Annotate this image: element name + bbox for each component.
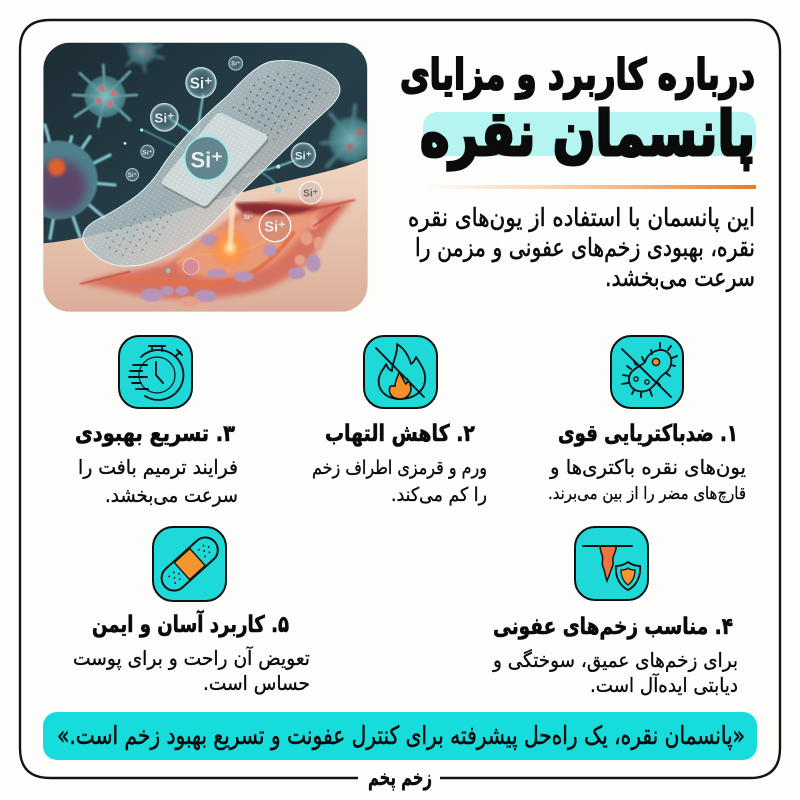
wound <box>80 200 355 307</box>
description: ورم و قرمزی اطراف زخم <box>312 457 487 479</box>
description: سرعت می‌بخشد. <box>105 483 238 507</box>
panel: benefit 4 infected wounds <box>492 527 738 697</box>
silver ion bubbles: Si⁺ <box>155 110 174 125</box>
virus: top centre <box>123 37 163 72</box>
description <box>492 648 738 697</box>
description: فرایند ترمیم بافت را <box>78 455 238 479</box>
silver ion bubbles: Si⁺ <box>295 150 312 162</box>
glow rays <box>143 93 303 250</box>
callout banner <box>43 712 757 760</box>
description <box>73 645 310 695</box>
silver ion bubbles: Si⁺ <box>190 147 223 172</box>
silver ion bubbles: Si⁺ <box>128 172 137 179</box>
silver ion bubbles: Si⁺ <box>303 189 318 200</box>
silver ion bubbles <box>124 56 322 273</box>
intro paragraph <box>408 203 755 292</box>
heading: ۱. ضدباکتریایی قوی <box>558 421 738 447</box>
description <box>312 457 487 506</box>
description: حساس است. <box>203 671 310 695</box>
icon: wound and shield <box>575 527 648 600</box>
description <box>78 455 238 507</box>
icon: bacteria crossed out <box>611 336 683 408</box>
heading: ۳. تسریع بهبودی <box>75 421 235 447</box>
intro paragraph: این پانسمان با استفاده از یون‌های نقره <box>408 203 755 232</box>
icon: adhesive bandage <box>153 527 226 601</box>
description: را کم می‌کند. <box>391 484 487 506</box>
title highlight <box>423 112 756 156</box>
silver ion bubbles: Si⁺ <box>142 149 153 156</box>
silver ion bubbles: Si⁺ <box>190 75 212 92</box>
panel: benefit 3 faster healing <box>75 336 238 507</box>
virus: top left <box>73 65 137 127</box>
heading: ۵. کاربرد آسان و ایمن <box>92 609 289 638</box>
heading: ۲. کاهش التهاب <box>325 421 475 447</box>
virus: left large <box>43 122 118 241</box>
icon: flame crossed out <box>364 336 437 408</box>
brand footer: زخم پخم <box>368 766 432 791</box>
silver ion bubbles: Si⁺ <box>244 214 253 221</box>
bandage strip <box>83 61 340 266</box>
centre pad <box>162 138 268 209</box>
skin <box>43 158 367 312</box>
silver ion bubbles: Si⁺ <box>264 220 286 236</box>
heading: ۴. مناسب زخم‌های عفونی <box>493 614 733 640</box>
panel: benefit 5 easy use <box>73 527 310 695</box>
orange gradient rule <box>420 185 756 189</box>
intro paragraph: سرعت می‌بخشد. <box>605 263 755 292</box>
panel: benefit 1 antibacterial <box>548 336 746 504</box>
description: دیابتی ایده‌آل است. <box>590 672 738 697</box>
description <box>548 455 746 504</box>
icon: stopwatch <box>119 336 192 408</box>
virus: right <box>322 105 377 167</box>
illustration: silver bandage over wound <box>43 42 368 312</box>
description: برای زخم‌های عمیق، سوختگی و <box>492 648 738 672</box>
description: قارچ‌های مضر را از بین می‌برند. <box>548 484 746 504</box>
silver ion bubbles: Si⁺ <box>231 61 240 68</box>
panel: benefit 2 reduce inflammation <box>312 336 487 506</box>
description: تعویض آن راحت و برای پوست <box>73 645 310 671</box>
description: یون‌های نقره باکتری‌ها و <box>549 455 746 479</box>
